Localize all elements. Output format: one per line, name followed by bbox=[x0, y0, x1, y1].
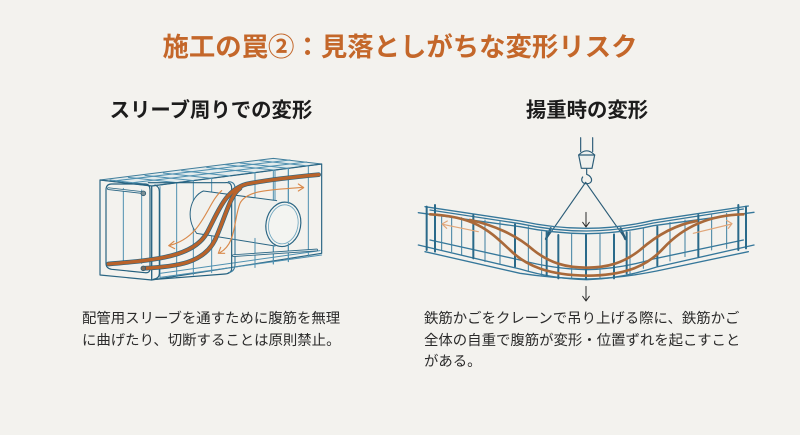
stirrups front bbox=[106, 182, 235, 279]
text: sleeve explanation: に曲げたり、切断することは原則禁止。 bbox=[82, 332, 340, 348]
heading: sleeve deformation: スリーブ周りでの変形 bbox=[110, 100, 312, 122]
main rebars deformed bbox=[430, 214, 743, 276]
sleeve bbox=[190, 168, 304, 267]
text: sleeve explanation bbox=[82, 310, 340, 348]
crane hook bbox=[546, 138, 625, 239]
heading: lifting deformation: 揚重時の変形 bbox=[526, 100, 648, 122]
thin arrows bbox=[442, 220, 732, 233]
text: lifting explanation: がある。 bbox=[424, 354, 482, 370]
text: lifting explanation: 全体の自重で腹筋が変形・位置ずれを起こすこと bbox=[424, 332, 740, 348]
main bars bbox=[108, 175, 319, 268]
text: lifting explanation bbox=[424, 310, 740, 370]
stirrups bbox=[442, 213, 727, 279]
arrow: down upper bbox=[583, 212, 589, 227]
thin arrows bbox=[169, 184, 304, 253]
diagram: rebar cage being lifted bbox=[418, 138, 754, 301]
title: 施工の罠②：見落としがちな変形リスク bbox=[162, 32, 638, 62]
rebar bars bbox=[418, 206, 754, 280]
arrow: down lower bbox=[583, 286, 589, 301]
text: sleeve explanation: 配管用スリーブを通すために腹筋を無理 bbox=[82, 311, 340, 327]
text: lifting explanation: 鉄筋かごをクレーンで吊り上げる際に、鉄筋かご bbox=[424, 311, 739, 327]
